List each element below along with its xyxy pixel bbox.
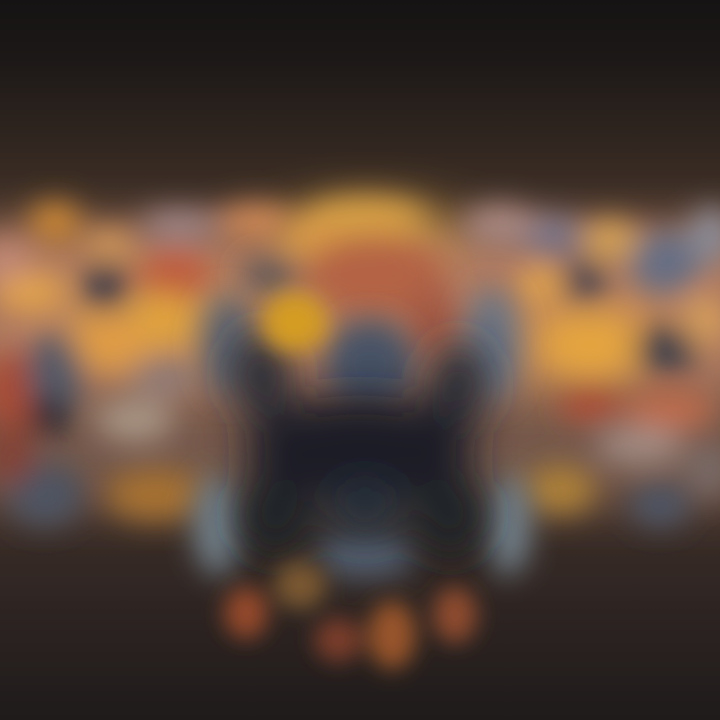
band: soft colour haze [0, 206, 720, 505]
objects: centre dark spheres [194, 287, 530, 577]
objects: sphere dark cores [232, 331, 488, 557]
objects: centre orange cluster [242, 198, 458, 356]
object: yellow sphere [262, 292, 328, 352]
reflection: lower orange shapes [224, 561, 477, 669]
objects: left and right pebbles [0, 202, 720, 527]
